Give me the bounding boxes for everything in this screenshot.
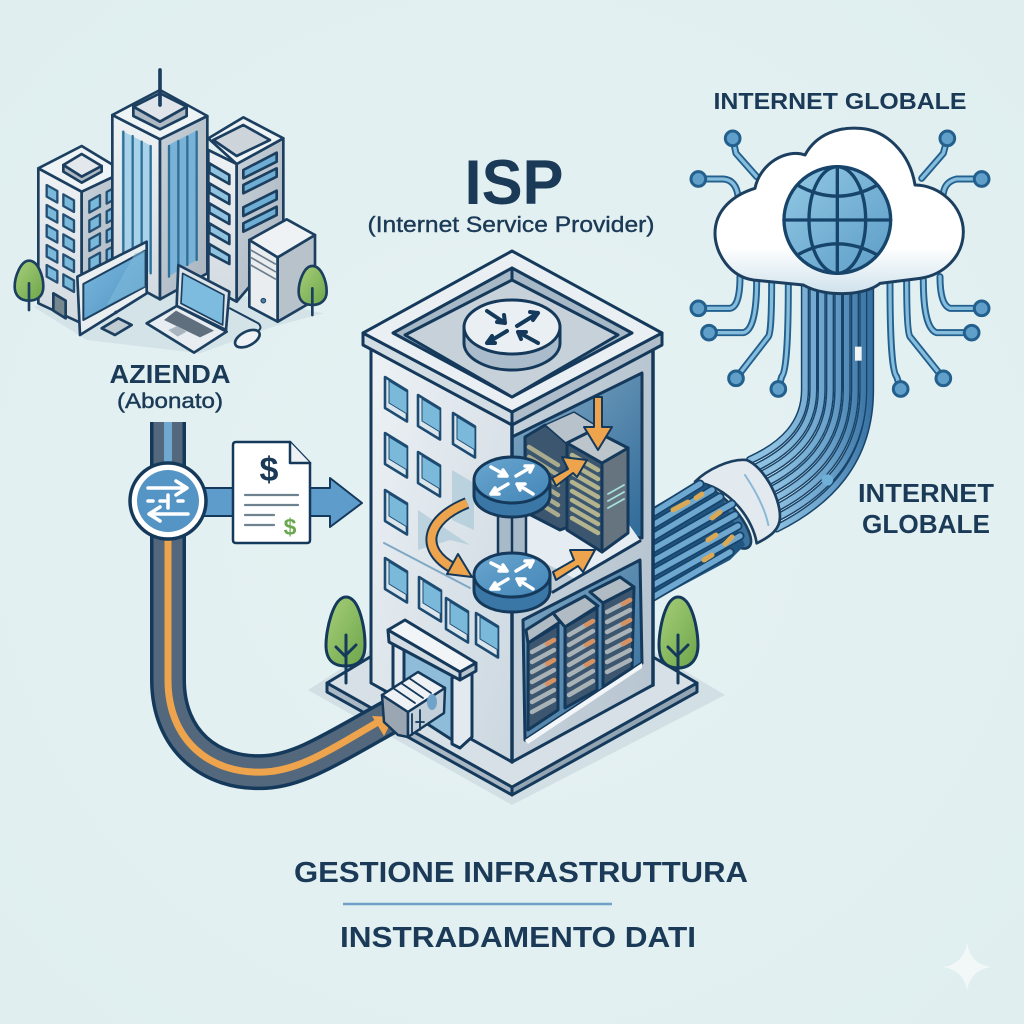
arrow: billing flow [200, 478, 362, 527]
building: left office [38, 146, 124, 323]
building base [327, 657, 697, 795]
heading: internet service provider: (Internet Service Provider) [368, 212, 654, 237]
icon: monitor [77, 242, 147, 335]
wall edges [512, 340, 653, 762]
arrow: curved orange between routers [431, 503, 472, 577]
label: azienda: AZIENDA [110, 359, 231, 389]
label: internet globale right: GLOBALE [862, 509, 990, 539]
icon: laptop [147, 265, 229, 353]
ground shadow [33, 293, 323, 353]
building: right office [208, 117, 283, 302]
label: internet globale right [858, 478, 994, 539]
icon: mouse [230, 308, 262, 351]
cloud [715, 128, 963, 294]
building: central glass tower [112, 70, 207, 299]
icon: RJ45 connector [380, 672, 445, 737]
roof [363, 251, 662, 425]
server rack 1 [526, 613, 560, 730]
icon: invoice document [233, 442, 310, 543]
server rack 2 [553, 596, 598, 708]
cable: azienda to ISP [168, 422, 398, 772]
fibre strands entering building [648, 480, 745, 604]
ground shadow [308, 650, 725, 805]
heading: ISP: ISP [464, 148, 564, 218]
label: gestione infrastruttura: GESTIONE INFRASTRUTTURA [294, 857, 748, 889]
arrow: orange lower router to server [553, 550, 595, 580]
icon: lower router [474, 553, 550, 612]
arrow: cable head [372, 716, 394, 736]
icon: rooftop router [464, 300, 560, 370]
circuit traces [698, 138, 982, 389]
icon: tree right [299, 266, 327, 315]
icon: tree left of building [326, 597, 365, 683]
panel: ISP building [308, 251, 725, 805]
lower server room [523, 560, 642, 744]
left wall windows [384, 377, 498, 658]
sleeve band [684, 460, 780, 557]
dollar sign green: $ [284, 514, 297, 540]
fibre cable bundle [750, 283, 870, 528]
riser between routers [498, 515, 526, 555]
icon: upper router [474, 457, 550, 517]
dollar sign dark: $ [260, 451, 279, 489]
left wall [371, 340, 512, 762]
icon: globe [784, 167, 891, 273]
arrow: orange upper router to server [552, 457, 587, 486]
icon: tree left [15, 261, 43, 310]
circuit nodes [691, 131, 989, 396]
label: abonato: (Abonato) [117, 390, 223, 413]
upper server room [512, 373, 642, 592]
server rack 3 [590, 577, 634, 687]
icon: tree right of building [659, 597, 698, 683]
icon: traffic switch circle [130, 463, 206, 539]
entrance portico [388, 620, 476, 748]
label: instradamento dati: INSTRADAMENTO DATI [340, 922, 696, 954]
label: internet globale top: INTERNET GLOBALE [714, 88, 966, 114]
panel: azienda buildings and computers [15, 70, 327, 353]
panel: cloud with fibre cable [684, 128, 989, 557]
icon: sparkle watermark [943, 943, 991, 991]
icon: desktop tower [249, 219, 315, 322]
label: internet globale right: INTERNET [858, 478, 994, 508]
right wall [512, 340, 653, 762]
arrow: orange down to server [584, 397, 612, 450]
